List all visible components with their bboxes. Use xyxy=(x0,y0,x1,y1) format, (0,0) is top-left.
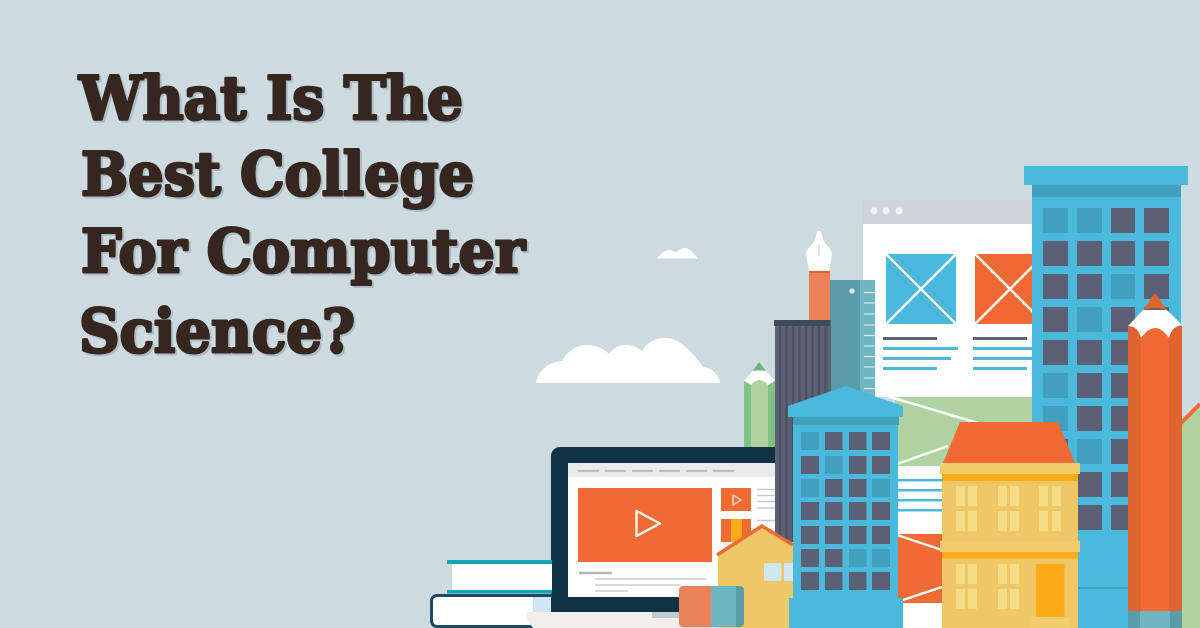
large orange pencil xyxy=(1128,293,1182,628)
door xyxy=(1030,564,1070,628)
right green hill xyxy=(1176,408,1200,628)
second video thumbnail xyxy=(721,519,751,542)
small house xyxy=(717,526,794,628)
title: Best College xyxy=(81,140,474,210)
image placeholder: blue xyxy=(886,254,956,324)
browser window xyxy=(863,200,1045,397)
sidebar text lines xyxy=(757,490,776,520)
small video thumbnail xyxy=(721,488,751,511)
dark skyscraper xyxy=(774,320,831,542)
video caption lines xyxy=(579,572,612,574)
mid blue building xyxy=(788,386,903,628)
title: For Computer xyxy=(81,217,526,287)
yellow building xyxy=(940,422,1080,628)
eraser xyxy=(679,586,744,627)
small cloud xyxy=(657,248,698,258)
text lines: column two xyxy=(973,337,1035,370)
ruler xyxy=(830,280,875,400)
laptop xyxy=(551,447,790,612)
icon: pen xyxy=(806,231,832,321)
tower windows xyxy=(1043,208,1169,530)
laptop base xyxy=(527,612,682,628)
text lines: column one xyxy=(883,337,958,370)
green pencil xyxy=(744,362,775,450)
title xyxy=(78,64,526,367)
orange diagonal line xyxy=(1178,404,1200,426)
tall blue tower xyxy=(1024,166,1188,628)
title: What Is The xyxy=(78,64,463,134)
large cloud xyxy=(536,338,720,383)
stack of books xyxy=(432,560,552,626)
title: Science? xyxy=(79,297,355,367)
image placeholder: orange xyxy=(975,254,1045,324)
mid building windows xyxy=(801,432,890,590)
video panel xyxy=(578,488,712,562)
lower web page panel xyxy=(880,394,1035,628)
yellow building windows xyxy=(956,486,1061,609)
